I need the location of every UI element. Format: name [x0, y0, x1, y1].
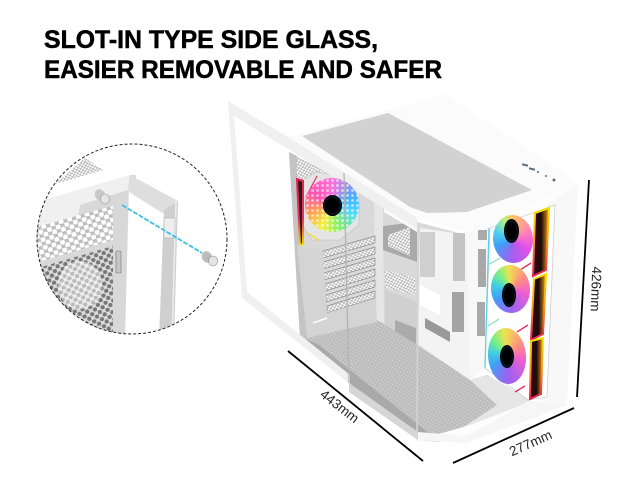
glass panel front edge [417, 229, 418, 432]
right RGB light strips [530, 208, 549, 399]
clip [164, 218, 175, 238]
title: EASIER REMOVABLE AND SAFER [44, 56, 442, 84]
left rear fan frame [303, 172, 360, 241]
dimension: length: 443mm [317, 386, 362, 426]
detail callout circle [30, 144, 227, 340]
case floor [300, 320, 530, 442]
fan mounting panel [485, 205, 555, 400]
frame top bar [129, 175, 178, 214]
front fan 2 hub [502, 283, 516, 307]
loose screw [200, 249, 218, 266]
fan opening [58, 261, 102, 309]
glass panel vertical edge [344, 173, 349, 383]
front fan 3 [486, 326, 528, 386]
right front panel [418, 183, 578, 443]
title [44, 26, 442, 84]
dimension: length [288, 351, 423, 461]
dimension: height [577, 180, 604, 397]
chassis panel [37, 175, 136, 334]
drive cage [383, 202, 417, 295]
front fan 2 [489, 263, 532, 315]
upper mesh [38, 206, 113, 262]
blue dashed guide line [122, 205, 202, 253]
dimension: width [453, 408, 574, 463]
front control buttons [522, 163, 556, 182]
slot handle [116, 251, 121, 273]
screw on panel [93, 187, 110, 204]
front fan 3 hub [500, 345, 514, 368]
dimension: width: 277mm [507, 427, 554, 459]
title: SLOT-IN TYPE SIDE GLASS, [44, 26, 378, 54]
left fan hub [323, 195, 342, 216]
PCIe slot covers [323, 236, 375, 313]
left RGB light strip [297, 179, 303, 245]
top mesh corner [55, 158, 103, 184]
side glass panel frame [228, 101, 417, 384]
frame vertical bar [159, 201, 178, 340]
dimensions and glass edge [36, 144, 602, 464]
left rear RGB fan [305, 178, 359, 232]
front pillar and fan bay [466, 226, 489, 380]
case top panel [288, 94, 578, 233]
lower left wall [297, 245, 377, 338]
dimension: height: 426mm [588, 266, 604, 312]
case interior back wall [289, 152, 470, 382]
front fan 1 [491, 213, 535, 265]
lower mesh [38, 246, 113, 334]
inner opening [125, 186, 134, 334]
front fan 1 hub [504, 219, 519, 243]
cable management panel [385, 228, 470, 382]
